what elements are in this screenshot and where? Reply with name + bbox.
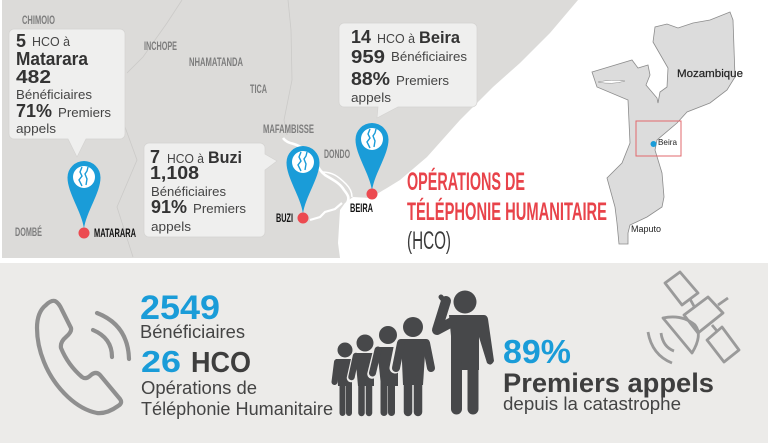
title: OPÉRATIONS DE — [407, 167, 525, 196]
stat: HCO count: Téléphonie Humanitaire — [141, 399, 333, 419]
callout: Buzi: Buzi — [208, 148, 242, 167]
icon: people line — [334, 290, 494, 413]
callout: Buzi: Premiers — [193, 201, 246, 216]
stat: first calls — [503, 333, 714, 414]
callout: Buzi: 7 — [150, 147, 160, 167]
callout: Matarara: Premiers — [58, 105, 112, 120]
stat: first calls: Premiers appels — [503, 368, 714, 398]
stat: first calls: 89% — [503, 333, 571, 370]
title: (HCO) — [407, 227, 451, 255]
map label: Chimoio: CHIMOIO — [22, 15, 55, 27]
map label: Dondo: DONDO — [324, 149, 350, 161]
callout: Beira: HCO à — [377, 31, 416, 46]
title: TÉLÉPHONIE HUMANITAIRE — [407, 197, 607, 226]
callout: Buzi: 91% — [151, 197, 187, 217]
icon: telephone — [37, 301, 129, 413]
map label: Mafambisse: MAFAMBISSE — [263, 124, 314, 136]
stat: beneficiaries — [140, 289, 245, 342]
callout: Beira: Premiers — [396, 73, 450, 88]
locator map: Mozambique: Mozambique — [677, 68, 743, 80]
callout: Matarara: Matarara — [16, 49, 89, 69]
callout: Matarara: HCO à — [32, 34, 71, 49]
locator map: Mozambique: Beira — [658, 137, 677, 147]
stat: HCO count — [141, 344, 333, 419]
stat: beneficiaries: Bénéficiaires — [140, 322, 245, 342]
map label: Nhamatanda: NHAMATANDA — [189, 57, 243, 69]
callout: Beira: appels — [351, 90, 392, 105]
callout: Beira: 88% — [351, 69, 390, 89]
stat: HCO count: 26 — [141, 344, 181, 379]
stat: HCO count: Opérations de — [141, 378, 257, 398]
callout: Buzi — [144, 143, 277, 237]
callout: Matarara: 482 — [16, 67, 51, 87]
callout: Beira: Beira — [419, 28, 461, 47]
callout: Matarara: 5 — [16, 31, 26, 51]
locator map: Mozambique — [592, 12, 743, 244]
icon: pin Buzi: BUZI — [276, 213, 293, 225]
icon: pin Beira — [350, 123, 388, 215]
stat: HCO count: HCO — [191, 347, 251, 379]
callout: Beira — [339, 23, 477, 118]
title — [407, 167, 607, 255]
callout: Beira: Bénéficiaires — [391, 49, 467, 64]
callout: Matarara: appels — [16, 121, 57, 136]
callout: Matarara — [9, 29, 125, 157]
map label: Tica: TICA — [250, 84, 267, 96]
icon: pin Matarara — [68, 161, 136, 240]
callout: Buzi: 1,108 — [150, 163, 199, 183]
callout: Buzi: HCO à — [167, 151, 205, 166]
panel: summary band — [0, 263, 768, 443]
stat: beneficiaries: 2549 — [140, 289, 220, 327]
callout: Buzi: appels — [151, 219, 192, 234]
stat: first calls: depuis la catastrophe — [503, 394, 681, 414]
callout: Matarara: Bénéficiaires — [16, 87, 92, 102]
callout: Beira: 14 — [351, 27, 371, 47]
icon: satellite — [648, 272, 739, 363]
callout: Beira: 959 — [351, 47, 385, 67]
panel: regional map — [2, 0, 578, 258]
icon: pin Beira: BEIRA — [350, 203, 373, 215]
callout: Matarara: 71% — [16, 101, 52, 121]
icon: pin Matarara: MATARARA — [94, 228, 136, 240]
map label: Dombé: DOMBÉ — [15, 226, 42, 239]
locator map: Mozambique: Maputo — [631, 224, 661, 234]
icon: pin Buzi — [276, 146, 320, 225]
callout: Buzi: Bénéficiaires — [151, 184, 226, 199]
map label: Inchope: INCHOPE — [144, 41, 177, 53]
